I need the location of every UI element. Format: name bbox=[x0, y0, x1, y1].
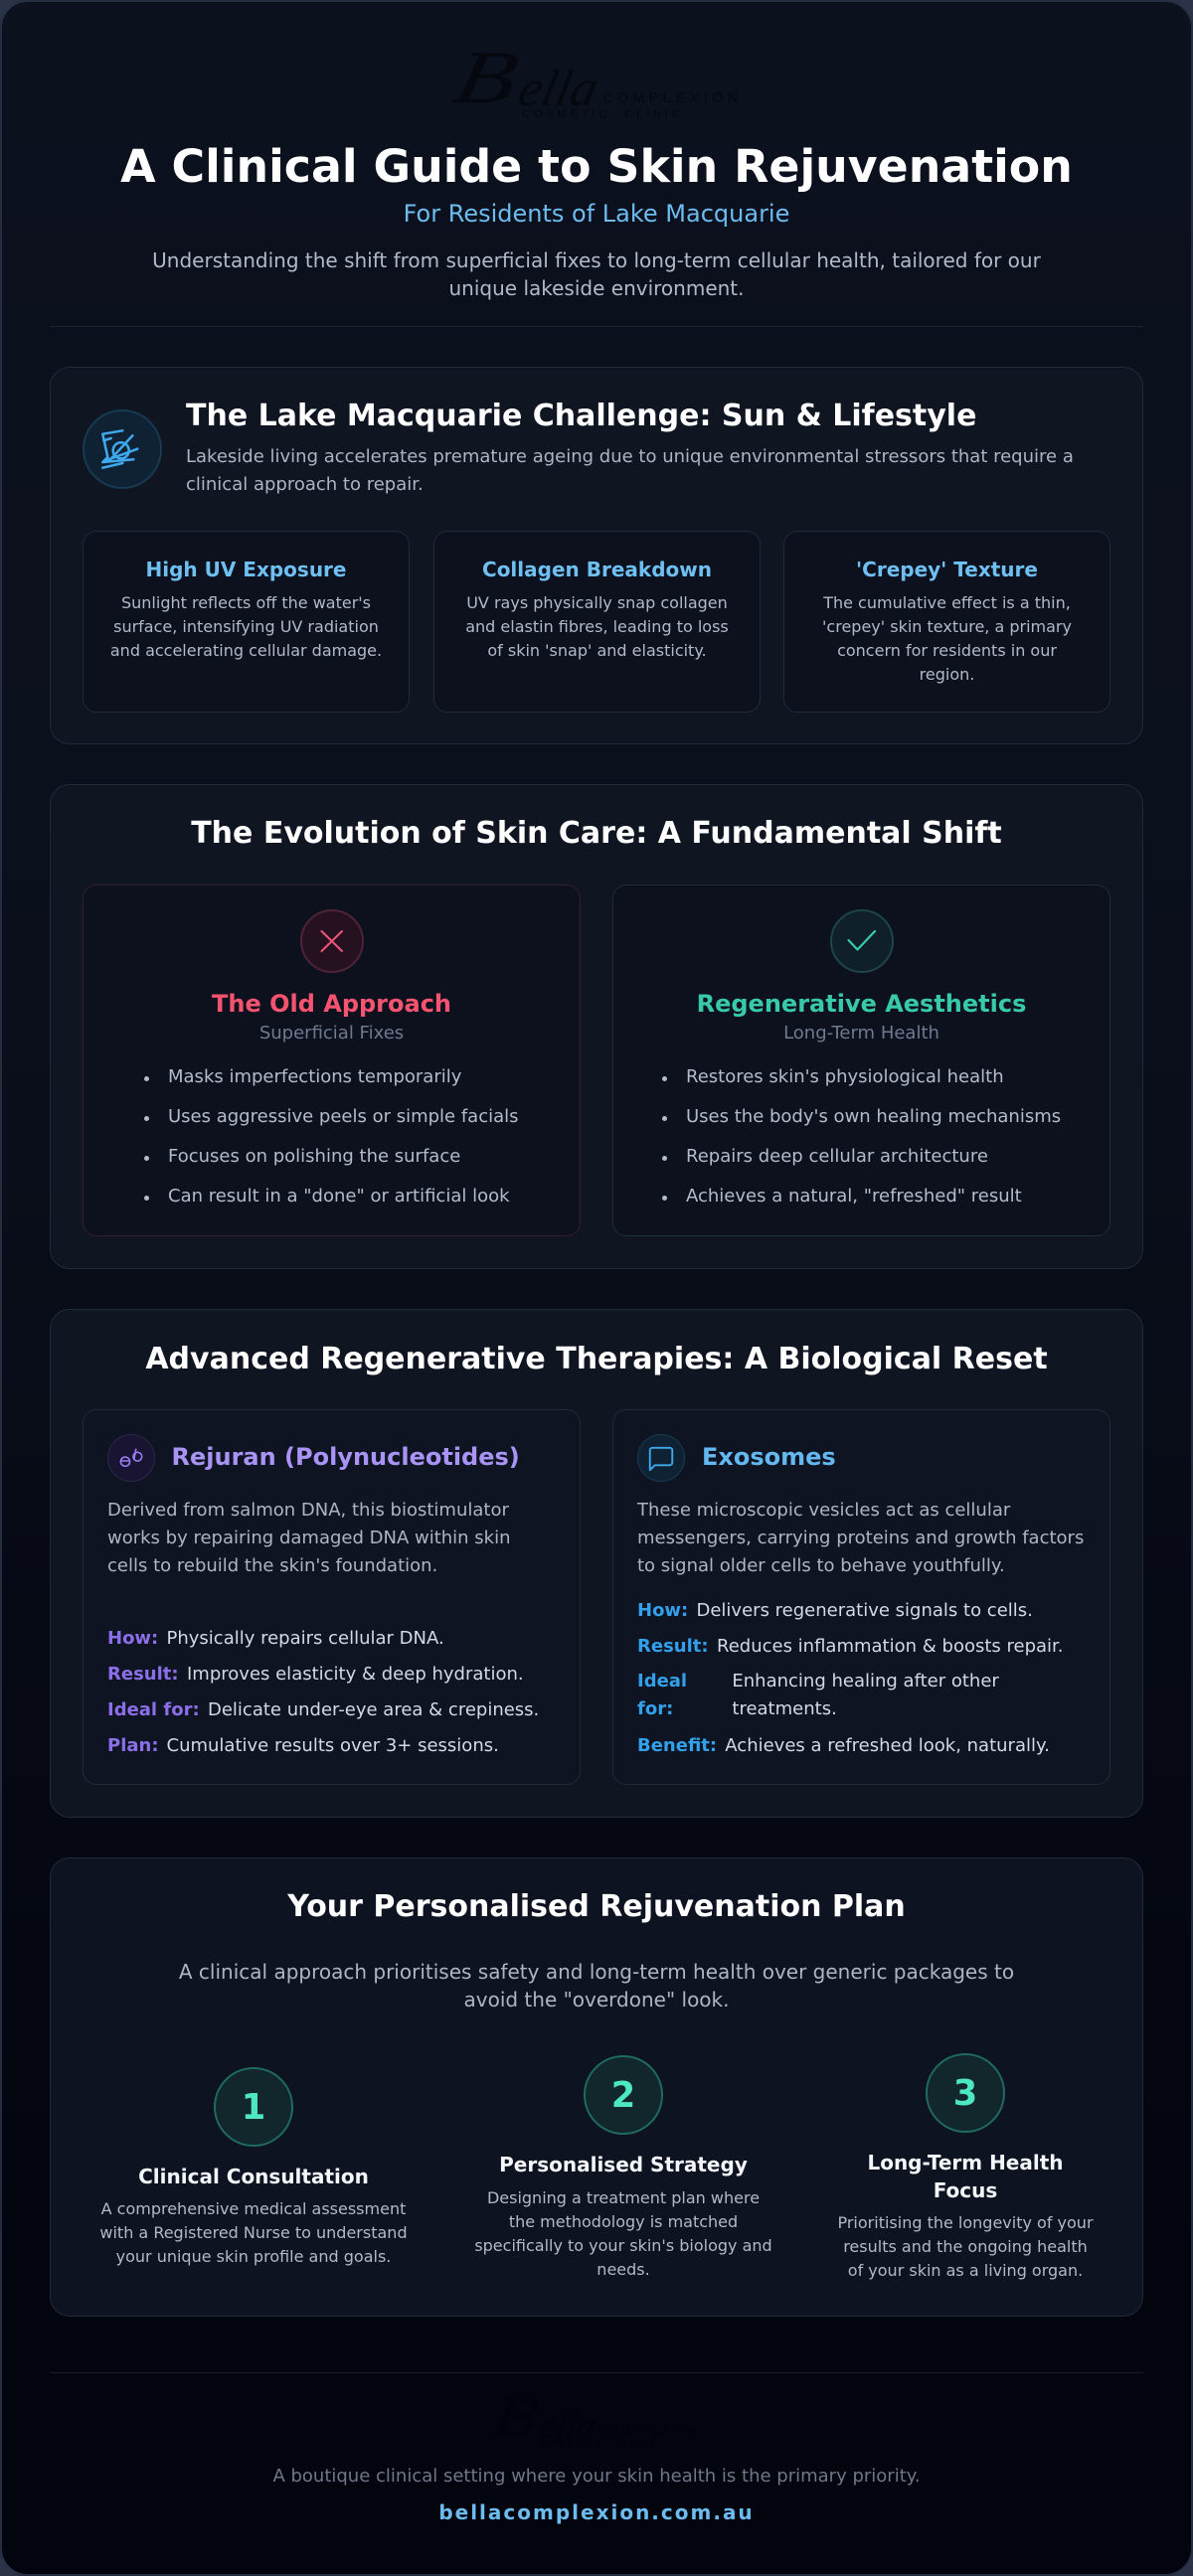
step 3 bbox=[837, 2053, 1094, 2280]
panel: personalised plan bbox=[50, 1857, 1143, 2317]
panel description: avoid the "overdone" look. bbox=[463, 1988, 730, 2012]
step text: results and the ongoing health bbox=[843, 2237, 1088, 2256]
card: regenerative aesthetics bbox=[612, 885, 1110, 1236]
step text: with a Registered Nurse to understand bbox=[99, 2223, 408, 2242]
header divider bbox=[50, 326, 1143, 327]
logo: Bella Complexion header: COSMETIC CLINIC bbox=[522, 108, 684, 120]
card: Exosomes: treatments. bbox=[732, 1698, 837, 1719]
bullet list: Repairs deep cellular architecture bbox=[686, 1146, 988, 1167]
detail: result bbox=[637, 1636, 1064, 1657]
icon: cross bbox=[300, 909, 364, 973]
step number: 1 bbox=[242, 2087, 265, 2127]
card description: Derived from salmon DNA, this biostimulator bbox=[107, 1500, 509, 1521]
panel: the Lake Macquarie challenge bbox=[50, 367, 1143, 744]
bullet list: Achieves a natural, "refreshed" result bbox=[686, 1186, 1022, 1207]
panel description: A clinical approach prioritises safety and long-term health over generic packages to bbox=[179, 1960, 1014, 1984]
step number: 2 bbox=[611, 2075, 635, 2115]
card description: works by repairing damaged DNA within skin bbox=[107, 1528, 511, 1548]
icon: DNA bbox=[107, 1434, 155, 1482]
intro text: Understanding the shift from superficial fixes to long-term cellular health, tailored for our bbox=[152, 248, 1041, 272]
step text: A comprehensive medical assessment bbox=[101, 2199, 406, 2218]
card description bbox=[636, 1500, 1084, 1576]
card: Rejuran: Improves elasticity & deep hydration. bbox=[187, 1664, 524, 1685]
card text: surface, intensifying UV radiation bbox=[113, 617, 379, 636]
detail: ideal for: for: bbox=[637, 1698, 673, 1719]
panel description bbox=[186, 446, 1074, 495]
card heading: Collagen Breakdown bbox=[482, 558, 712, 581]
card: Exosomes: Achieves a refreshed look, naturally. bbox=[725, 1735, 1050, 1756]
step 1 bbox=[99, 2067, 408, 2266]
heading: Your Personalised Rejuvenation Plan bbox=[287, 1889, 906, 1924]
card text: of skin 'snap' and elasticity. bbox=[487, 641, 707, 660]
detail: ideal for: Ideal bbox=[637, 1671, 687, 1691]
card subtitle: Long-Term Health bbox=[783, 1023, 939, 1044]
step text bbox=[99, 2199, 408, 2266]
step text: of your skin as a living organ. bbox=[848, 2261, 1083, 2280]
detail: ideal for bbox=[107, 1699, 539, 1720]
card title: Rejuran (Polynucleotides) bbox=[171, 1443, 520, 1471]
bullet list: Masks imperfections temporarily bbox=[168, 1066, 461, 1087]
icon: check bbox=[830, 909, 894, 973]
logo: Bella Complexion footer: COSMETIC CLINIC bbox=[542, 2439, 658, 2448]
step text: Designing a treatment plan where bbox=[487, 2188, 760, 2207]
step text: Prioritising the longevity of your bbox=[837, 2213, 1094, 2232]
card title: Regenerative Aesthetics bbox=[697, 990, 1026, 1018]
intro text bbox=[152, 248, 1041, 300]
detail: ideal for bbox=[637, 1671, 999, 1719]
card: Exosomes bbox=[612, 1409, 1110, 1785]
step title: Focus bbox=[934, 2178, 997, 2202]
card heading: 'Crepey' Texture bbox=[856, 558, 1038, 581]
detail: how: How: bbox=[107, 1628, 158, 1649]
card description: cells to rebuild the skin's foundation. bbox=[107, 1555, 437, 1576]
panel: evolution of skin care bbox=[50, 784, 1143, 1269]
icon: message bubble bbox=[637, 1434, 685, 1482]
card: Rejuran: Physically repairs cellular DNA. bbox=[167, 1628, 444, 1649]
logo: Bella Complexion header: ella bbox=[514, 61, 603, 117]
intro text: unique lakeside environment. bbox=[449, 276, 744, 300]
detail: result bbox=[107, 1664, 524, 1685]
panel description: clinical approach to repair. bbox=[186, 474, 424, 495]
step text: the methodology is matched bbox=[509, 2212, 738, 2231]
logo: Bella Complexion header: COMPLEXION bbox=[602, 89, 743, 105]
card text: and accelerating cellular damage. bbox=[110, 641, 382, 660]
logo: Bella Complexion footer: COMPLEXION bbox=[599, 2426, 700, 2437]
card: Exosomes: Reduces inflammation & boosts repair. bbox=[717, 1636, 1064, 1657]
card text bbox=[465, 593, 729, 660]
card text: region. bbox=[920, 665, 974, 684]
step title: Clinical Consultation bbox=[138, 2165, 369, 2188]
bullet list bbox=[662, 1066, 1061, 1207]
bullet list: Can result in a "done" or artificial look bbox=[168, 1186, 510, 1207]
detail: benefit: Benefit: bbox=[637, 1735, 717, 1756]
card heading: High UV Exposure bbox=[145, 558, 346, 581]
detail: benefit bbox=[637, 1735, 1050, 1756]
card: collagen breakdown bbox=[433, 531, 761, 713]
card: Rejuran: Cumulative results over 3+ sessions. bbox=[167, 1735, 499, 1756]
step number bbox=[214, 2067, 293, 2147]
card text: The cumulative effect is a thin, bbox=[823, 593, 1071, 612]
bullet list: Uses aggressive peels or simple facials bbox=[168, 1106, 519, 1127]
step number bbox=[584, 2055, 663, 2135]
card description: These microscopic vesicles act as cellular bbox=[637, 1500, 1010, 1521]
card text: Sunlight reflects off the water's bbox=[121, 593, 371, 612]
heading: The Evolution of Skin Care: A Fundamental Shift bbox=[191, 816, 1002, 851]
step text bbox=[474, 2188, 772, 2279]
card subtitle: Superficial Fixes bbox=[259, 1023, 404, 1044]
step number bbox=[926, 2053, 1005, 2133]
card description: to signal older cells to behave youthfully. bbox=[637, 1555, 1005, 1576]
step number: 3 bbox=[953, 2073, 977, 2113]
footer website: bellacomplexion.com.au bbox=[438, 2500, 755, 2524]
bullet list: Focuses on polishing the surface bbox=[168, 1146, 460, 1167]
logo: Bella Complexion footer bbox=[494, 2397, 698, 2449]
detail: ideal for: Ideal for: bbox=[107, 1699, 200, 1720]
step 2 bbox=[474, 2055, 772, 2279]
step title bbox=[867, 2151, 1064, 2202]
card: Rejuran bbox=[83, 1409, 581, 1785]
card: high UV exposure bbox=[83, 531, 410, 713]
step text: specifically to your skin's biology and bbox=[474, 2236, 772, 2255]
logo: Bella Complexion footer: ella bbox=[535, 2405, 599, 2446]
card: the old approach bbox=[83, 885, 581, 1236]
step text: needs. bbox=[596, 2260, 650, 2279]
heading: The Lake Macquarie Challenge: Sun & Lifestyle bbox=[186, 399, 976, 433]
card text: 'crepey' skin texture, a primary bbox=[822, 617, 1072, 636]
card: crepey texture bbox=[783, 531, 1110, 713]
logo: Bella Complexion header bbox=[447, 36, 743, 120]
bullet list: Restores skin's physiological health bbox=[686, 1066, 1004, 1087]
panel description: Lakeside living accelerates premature ageing due to unique environmental stressors that require a bbox=[186, 446, 1074, 467]
card description: messengers, carrying proteins and growth factors bbox=[637, 1528, 1084, 1548]
bullet list bbox=[144, 1066, 519, 1207]
card description bbox=[107, 1500, 511, 1576]
heading: Advanced Regenerative Therapies: A Biological Reset bbox=[145, 1342, 1048, 1376]
card text: concern for residents in our bbox=[837, 641, 1057, 660]
icon: sun and skin scribble bbox=[83, 409, 162, 489]
bullet list: Uses the body's own healing mechanisms bbox=[686, 1106, 1061, 1127]
footer tagline: A boutique clinical setting where your skin health is the primary priority. bbox=[272, 2466, 921, 2487]
subtitle: For Residents of Lake Macquarie bbox=[404, 200, 789, 228]
step text: your unique skin profile and goals. bbox=[116, 2247, 391, 2266]
detail: plan bbox=[107, 1735, 499, 1756]
title: A Clinical Guide to Skin Rejuvenation bbox=[120, 139, 1073, 193]
panel: regenerative therapies bbox=[50, 1309, 1143, 1818]
detail: how: How: bbox=[637, 1600, 688, 1621]
step text bbox=[837, 2213, 1094, 2280]
card text: and elastin fibres, leading to loss bbox=[465, 617, 729, 636]
card title: The Old Approach bbox=[212, 990, 451, 1018]
footer divider bbox=[50, 2372, 1143, 2373]
card text bbox=[110, 593, 382, 660]
detail: how bbox=[637, 1600, 1033, 1621]
card title: Exosomes bbox=[702, 1443, 836, 1471]
step title: Long-Term Health bbox=[867, 2151, 1064, 2174]
card: Exosomes: Delivers regenerative signals to cells. bbox=[696, 1600, 1033, 1621]
card text: UV rays physically snap collagen bbox=[466, 593, 728, 612]
card: Rejuran: Delicate under-eye area & crepiness. bbox=[208, 1699, 539, 1720]
panel description bbox=[179, 1960, 1014, 2012]
card: Exosomes: Enhancing healing after other bbox=[732, 1671, 999, 1691]
detail: result: Result: bbox=[107, 1664, 179, 1685]
detail: result: Result: bbox=[637, 1636, 709, 1657]
card text bbox=[822, 593, 1072, 684]
step title: Personalised Strategy bbox=[499, 2153, 748, 2176]
logo: Bella Complexion footer: B bbox=[488, 2387, 544, 2447]
detail: how bbox=[107, 1628, 444, 1649]
logo: Bella Complexion header: B bbox=[447, 36, 525, 119]
detail: plan: Plan: bbox=[107, 1735, 159, 1756]
